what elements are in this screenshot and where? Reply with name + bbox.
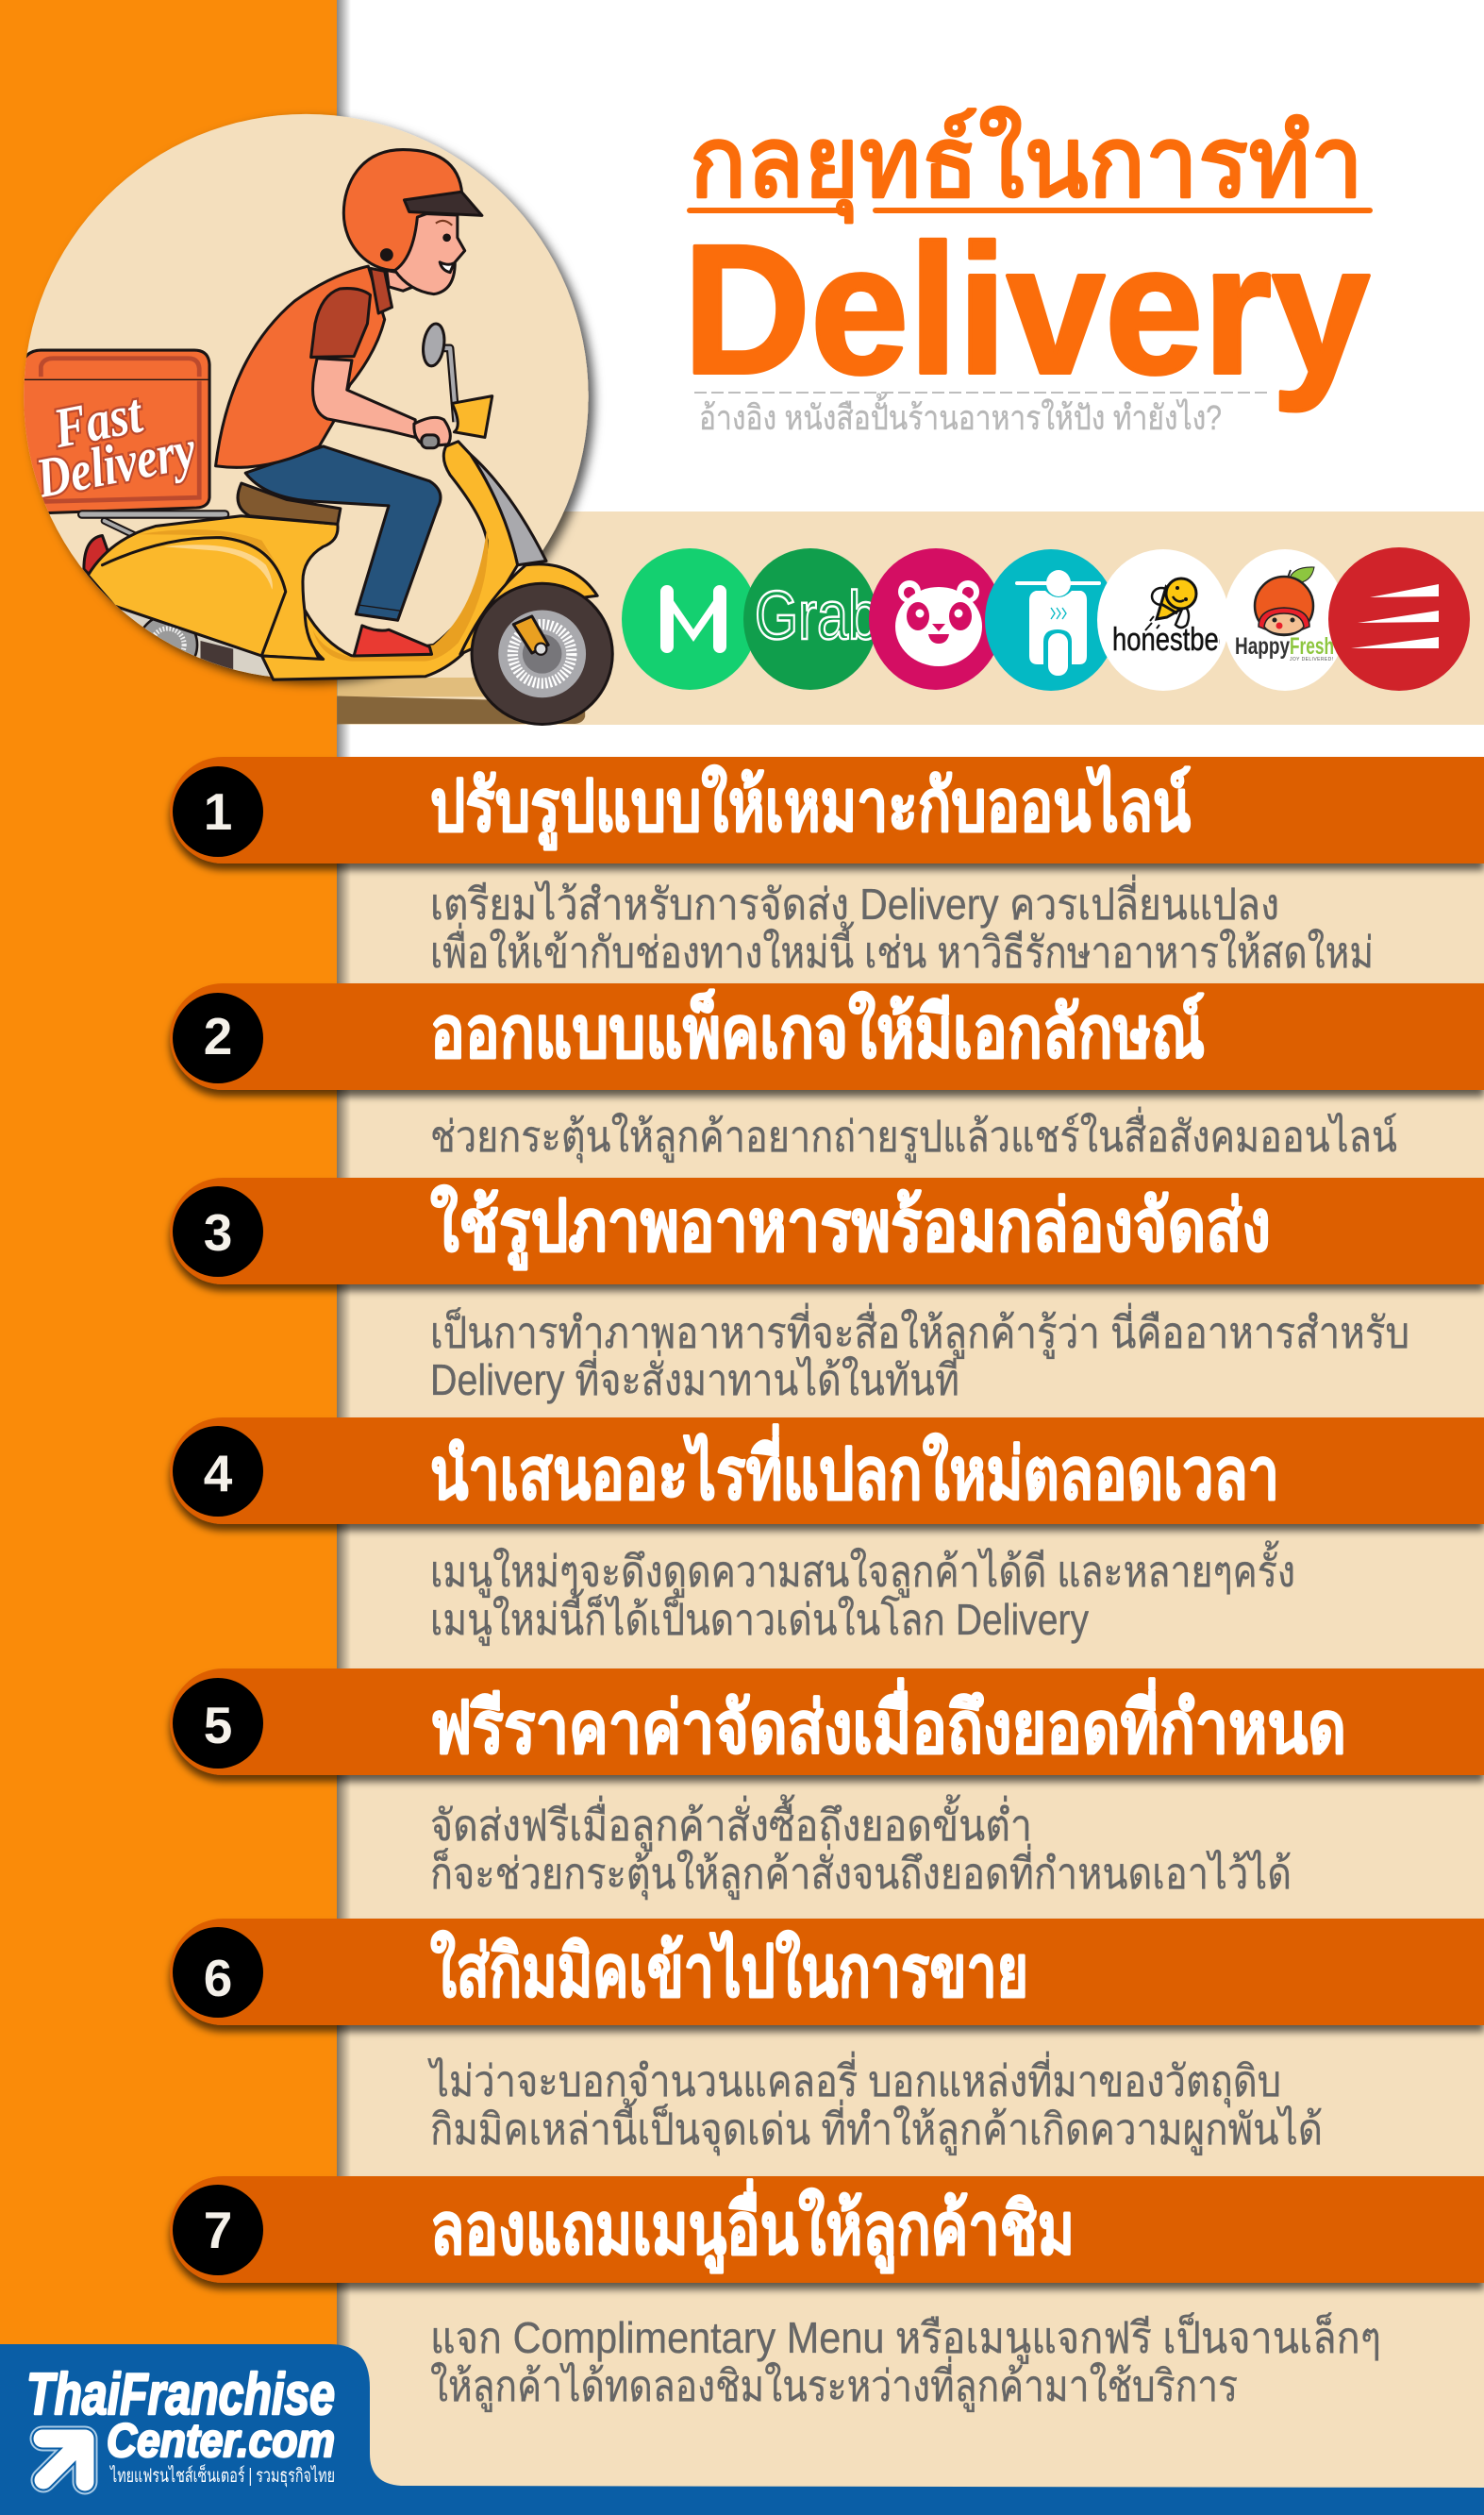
- rider sleeve: [311, 289, 370, 357]
- step 2 number: 2: [204, 1007, 232, 1065]
- step 3 number: 3: [204, 1203, 232, 1262]
- leg shield and footboard: [262, 442, 518, 679]
- step 2: [170, 983, 1484, 1164]
- step 1 description: เตรียมไว้สำหรับการจัดส่ง Delivery ควรเปลี่ยนแปลง: [430, 874, 1279, 929]
- step 6 number: 6: [204, 1949, 232, 2007]
- step 2 banner: [170, 983, 1484, 1090]
- step 6 description: กิมมิคเหล่านี้เป็นจุดเด่น ที่ทำให้ลูกค้าเกิดความผูกพันได้: [430, 2098, 1323, 2156]
- step 4 number: 4: [204, 1444, 233, 1502]
- logo: Grab: Grab: [755, 578, 879, 654]
- step 7 number: 7: [204, 2201, 232, 2259]
- logo: LINE MAN: [622, 548, 758, 690]
- front fender: [460, 564, 597, 654]
- step 7 description: [430, 2312, 1381, 2412]
- step 5 description: [430, 1794, 1292, 1901]
- leg shield gray strip: [471, 455, 546, 565]
- logo: HappyFresh: Happy: [1235, 633, 1290, 660]
- step 7 banner: [170, 2176, 1484, 2283]
- rear wheel: [114, 604, 270, 679]
- step 1: [170, 757, 1484, 977]
- delivery box: [16, 350, 210, 513]
- rider jeans: [245, 446, 441, 620]
- step 3: [170, 1178, 1484, 1404]
- step 5: [170, 1668, 1484, 1901]
- logo: Grab: [743, 548, 879, 690]
- logo: HappyFresh: JOY DELIVERED!: [1290, 657, 1333, 662]
- box lettering: [36, 397, 196, 499]
- step 3 description: [430, 1302, 1409, 1404]
- step 4: [170, 1417, 1484, 1646]
- step 1 banner: [170, 757, 1484, 863]
- handlebar mirror: [421, 323, 457, 422]
- step 3 heading: ใช้รูปภาพอาหารพร้อมกล่องจัดส่ง: [430, 1184, 1271, 1270]
- step 7: [170, 2176, 1484, 2412]
- scooter rear body: [88, 516, 338, 660]
- box lettering: Delivery: [30, 418, 201, 510]
- dashed divider and source reference: อ้างอิง หนังสือปั้นร้านอาหารให้ปัง ทำยังไง?: [699, 393, 1222, 437]
- step 6: [170, 1919, 1484, 2156]
- blue footer: [0, 2344, 1484, 2515]
- logo Thai tagline: ไทยแฟรนไชส์เซ็นเตอร์ | รวมธุรกิจไทย: [109, 2463, 335, 2488]
- logo: honestbee: [1097, 549, 1233, 691]
- logo: honestbee: honestbee: [1112, 622, 1233, 658]
- step 4 description: เมนูใหม่ๆจะดึงดูดความสนใจลูกค้าได้ดี และหลายๆครั้ง: [430, 1540, 1295, 1598]
- rider shoe: [354, 626, 432, 656]
- illustration: delivery rider on scooter: [16, 114, 612, 724]
- step 3 banner: [170, 1178, 1484, 1284]
- rack: [82, 514, 225, 539]
- logo: foodpanda: [869, 548, 1003, 690]
- step 6 description: [427, 2051, 1323, 2156]
- step 5 number: [173, 1678, 263, 1769]
- logo wordmark line two: Center.com: [107, 2414, 335, 2467]
- step 6 number: [173, 1927, 263, 2018]
- step 5 description: จัดส่งฟรีเมื่อลูกค้าสั่งซื้อถึงยอดขั้นต่ำ: [430, 1794, 1032, 1852]
- ground strip: [337, 678, 585, 724]
- step 2 number: [173, 993, 263, 1083]
- rider arm: [313, 359, 415, 437]
- step 4 banner: [170, 1417, 1484, 1524]
- scooter headlamp cowl: [452, 396, 492, 437]
- logo: teal scooter: [985, 549, 1117, 691]
- step 4 number: [173, 1426, 263, 1517]
- icon: arrow: [42, 2439, 85, 2482]
- step 5 banner: [170, 1668, 1484, 1775]
- step 7 heading: ลองแถมเมนูอื่นให้ลูกค้าชิม: [430, 2178, 1075, 2273]
- step 3 description: Delivery ที่จะสั่งมาทานได้ในทันที: [430, 1350, 959, 1404]
- orange side column: [0, 0, 351, 2359]
- step 4 description: เมนูใหม่นี้ก็ได้เป็นดาวเด่นในโลก Delivery: [430, 1588, 1089, 1646]
- rider shirt: [216, 266, 385, 467]
- box lettering: Fast: [48, 381, 149, 460]
- step 6 banner: [170, 1919, 1484, 2025]
- rider face: [395, 213, 465, 294]
- step 1 number: [173, 766, 263, 857]
- scooter rear parts clipped to disc: [16, 350, 338, 679]
- rider neck and collar: [370, 268, 413, 313]
- step 2 heading: ออกแบบแพ็คเกจให้มีเอกลักษณ์: [430, 989, 1205, 1073]
- step 7 number: [173, 2185, 263, 2275]
- logo wordmark line one: ThaiFranchise: [26, 2362, 335, 2427]
- step 5 number: 5: [204, 1696, 232, 1754]
- rider hand and grip: [414, 417, 450, 448]
- logo: red wedges: [1328, 547, 1470, 691]
- step 7 description: แจก Complimentary Menu หรือเมนูแจกฟรี เป็นจานเล็กๆ: [430, 2312, 1381, 2364]
- seat: [238, 483, 341, 524]
- step 4 description: [430, 1540, 1295, 1646]
- tail light: [84, 536, 108, 578]
- footer logo: ThaiFranchise Center.com: [26, 2362, 335, 2488]
- step 1 number: 1: [204, 782, 232, 841]
- front wheel: [472, 583, 612, 724]
- beige disc: [24, 114, 589, 679]
- logo: HappyFresh: Fresh: [1290, 633, 1334, 660]
- step 7 description: ให้ลูกค้าได้ทดลองชิมในระหว่างที่ลูกค้ามาใช้บริการ: [430, 2356, 1238, 2412]
- rider helmet: [343, 150, 482, 270]
- logo: HappyFresh: [1224, 549, 1346, 691]
- beige content panel: [337, 863, 1484, 2488]
- step 3 number: [173, 1186, 263, 1277]
- scooter front: [262, 442, 612, 724]
- step 6 heading: ใส่กิมมิคเข้าไปในการขาย: [430, 1930, 1028, 2012]
- logo row: [622, 547, 1470, 691]
- title: Thai headline: กลยุทธ์ในการทำ: [690, 108, 1363, 223]
- step 6 description: ไม่ว่าจะบอกจำนวนแคลอรี่ บอกแหล่งที่มาของวัตถุดิบ: [427, 2051, 1281, 2108]
- title: Delivery: Delivery: [683, 207, 1370, 412]
- step 1 heading: ปรับรูปแบบให้เหมาะกับออนไลน์: [430, 764, 1192, 850]
- step 5 description: ก็จะช่วยกระตุ้นให้ลูกค้าสั่งจนถึงยอดที่กำหนดเอาไว้ได้: [430, 1843, 1292, 1901]
- beige logo band: [337, 511, 1484, 725]
- step 1 description: [430, 874, 1374, 977]
